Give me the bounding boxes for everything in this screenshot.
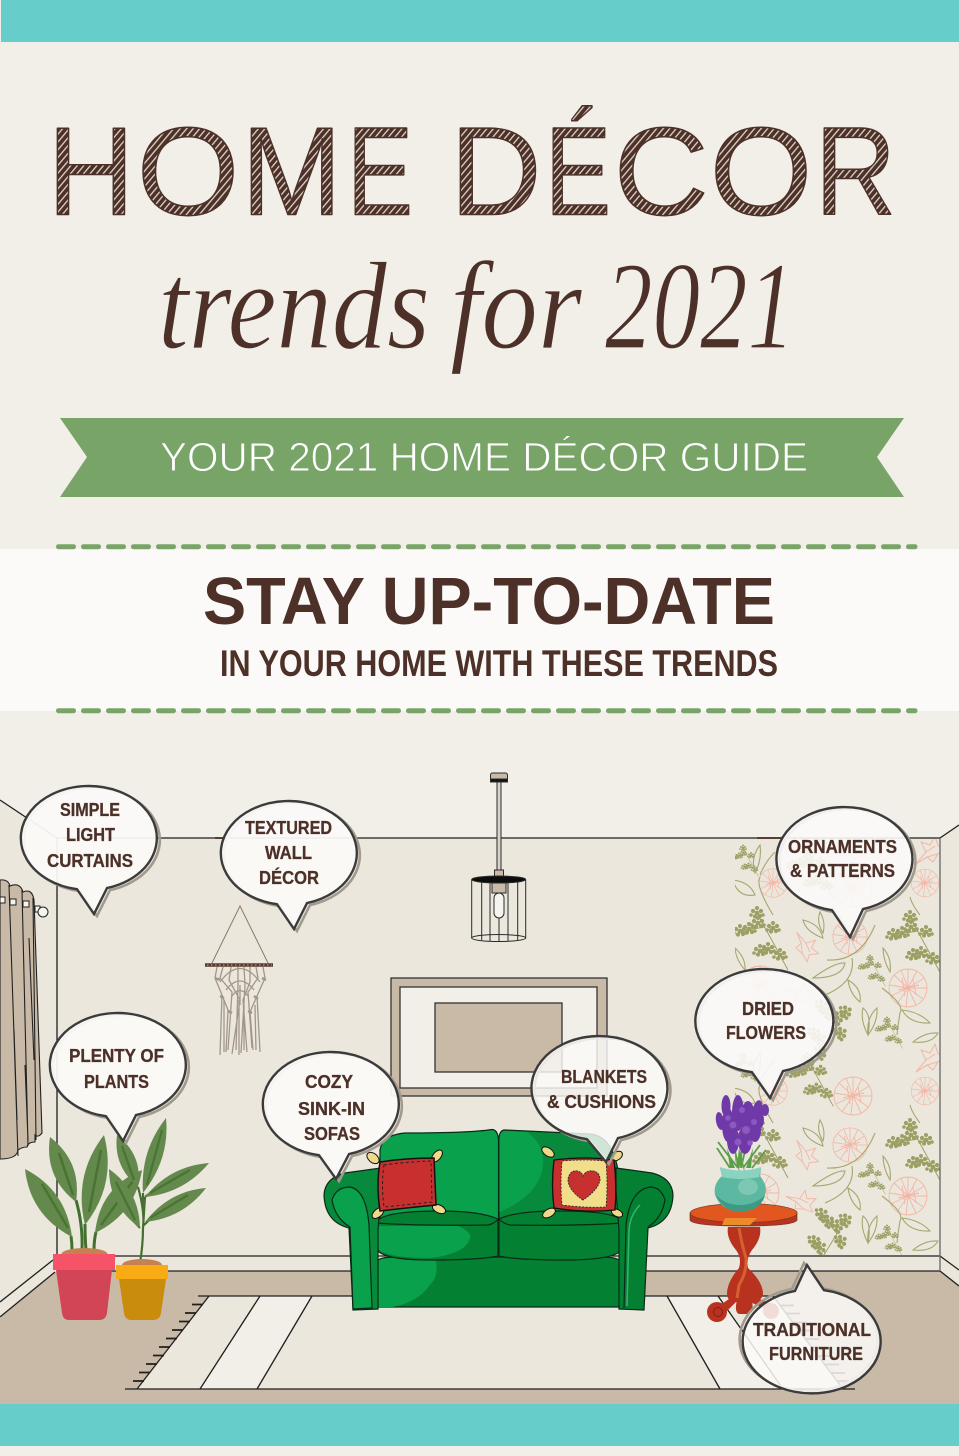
label text: SINK-IN xyxy=(298,1099,365,1119)
bubble: ornaments and patterns xyxy=(776,807,915,939)
title: Home Décor: M xyxy=(242,102,342,242)
subtitle: trends for 2021: 2021 xyxy=(605,238,795,376)
label text: SIMPLE xyxy=(60,800,120,820)
pendant lamp xyxy=(472,773,526,942)
title: Home Décor: É xyxy=(545,102,611,242)
sofa back right xyxy=(499,1130,618,1220)
bubble: textured wall decor xyxy=(221,801,360,931)
bottom teal band xyxy=(0,1404,959,1446)
label text: PLENTY OF xyxy=(69,1046,164,1066)
right seat cushion xyxy=(499,1211,624,1260)
floor xyxy=(0,1271,959,1404)
right arm xyxy=(616,1168,673,1310)
yellow pot xyxy=(119,1279,166,1320)
wall picture frame xyxy=(391,978,607,1096)
label text: & PATTERNS xyxy=(790,861,895,881)
label text: CURTAINS xyxy=(47,851,133,871)
title: Home Décor: O xyxy=(710,102,812,242)
subheading: IN YOUR HOME WITH THESE TRENDS xyxy=(220,643,778,684)
wallpaper xyxy=(735,839,940,1255)
left arm xyxy=(324,1168,381,1310)
walls xyxy=(0,800,959,1318)
room illustration xyxy=(0,772,959,1404)
title: Home Décor: H xyxy=(48,102,134,242)
subtitle: trends for 2021: trends xyxy=(158,238,430,376)
title: Home Décor: E xyxy=(347,102,413,242)
label text: DÉCOR xyxy=(259,867,319,888)
sofa base xyxy=(377,1257,620,1307)
banner text: YOUR 2021 HOME DÉCOR GUIDE xyxy=(160,434,808,480)
white heading band xyxy=(0,547,959,711)
label text: ORNAMENTS xyxy=(788,837,897,857)
ribbon banner xyxy=(60,418,904,497)
label text: BLANKETS xyxy=(561,1067,647,1087)
red cushion xyxy=(365,1148,447,1221)
heading: stay up-to-date: STAY UP-TO-DATE xyxy=(203,564,775,639)
left plant xyxy=(25,1135,142,1250)
subtitle: trends for 2021: for xyxy=(450,238,583,376)
macrame wall hanging xyxy=(205,906,273,1055)
lavender vase xyxy=(714,1095,769,1212)
left seat cushion xyxy=(374,1211,498,1260)
label text: WALL xyxy=(265,843,312,863)
top teal band xyxy=(1,0,959,42)
plants in pots xyxy=(25,1118,209,1320)
label text: FLOWERS xyxy=(726,1023,806,1043)
bubble: simple light curtains xyxy=(21,786,160,916)
title: Home Décor: R xyxy=(815,102,896,242)
rug xyxy=(125,1296,855,1389)
label text: TRADITIONAL xyxy=(753,1320,871,1340)
bubble: dried flowers xyxy=(695,969,836,1100)
bubble: cozy sink-in sofas xyxy=(263,1052,402,1181)
side table xyxy=(690,1204,797,1322)
label text: PLANTS xyxy=(84,1072,149,1092)
bubble: plenty of plants xyxy=(50,1013,189,1143)
bubble: blankets and cushions xyxy=(531,1036,670,1164)
curtain rod finial xyxy=(0,897,48,917)
room lines xyxy=(0,800,959,1317)
label text: & CUSHIONS xyxy=(547,1092,656,1112)
label text: COZY xyxy=(305,1072,353,1092)
green sofa xyxy=(324,1130,673,1310)
title: Home Décor: C xyxy=(614,102,709,242)
label text: FURNITURE xyxy=(769,1344,863,1364)
label text: TEXTURED xyxy=(245,818,332,838)
label text: DRIED xyxy=(742,999,794,1019)
right plant xyxy=(109,1118,209,1263)
bubble: traditional furniture xyxy=(740,1263,881,1393)
heart cushion xyxy=(540,1145,624,1220)
curtain xyxy=(0,880,48,1159)
label text: SOFAS xyxy=(304,1124,360,1144)
title: Home Décor: D xyxy=(450,102,542,242)
soil xyxy=(62,1248,108,1260)
pink pot xyxy=(56,1270,112,1320)
title: Home Décor: O xyxy=(137,102,239,242)
sofa back left xyxy=(380,1130,498,1220)
label text: LIGHT xyxy=(66,825,115,845)
